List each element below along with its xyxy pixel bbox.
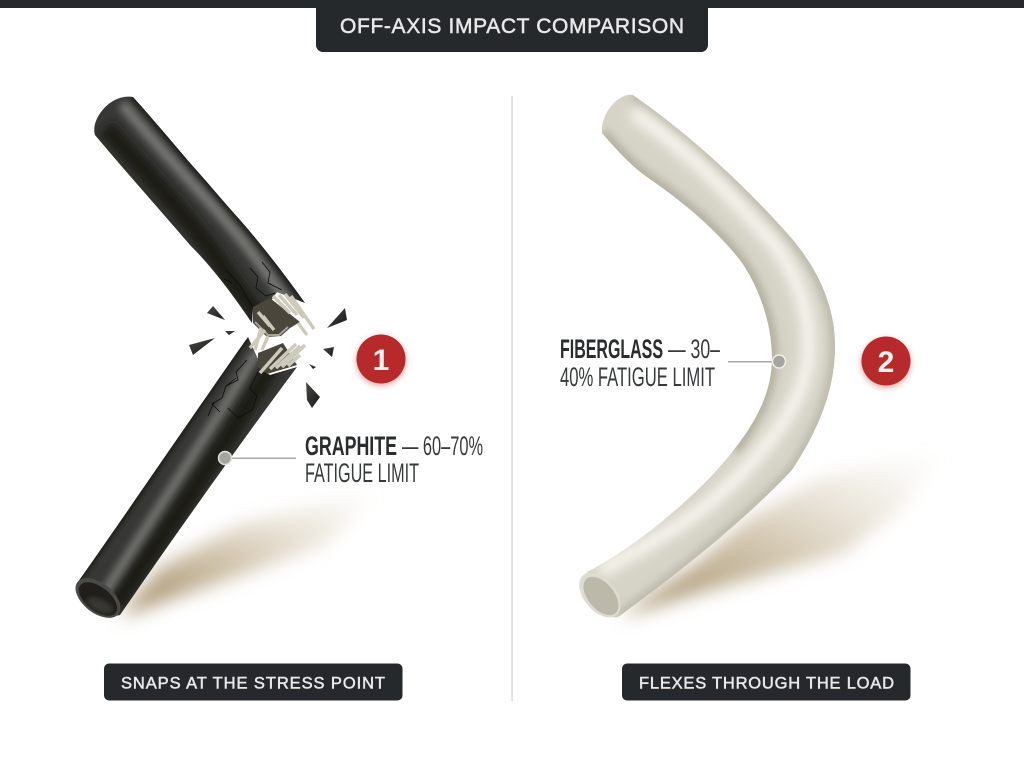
callout: graphite label: [218, 431, 483, 488]
caption: graphite: [104, 664, 402, 700]
label text: [560, 334, 720, 392]
callout: fiberglass label: [560, 334, 786, 392]
label text: GRAPHITE: [305, 431, 397, 461]
label text: [305, 431, 483, 488]
shadow: graphite tube: [120, 488, 385, 617]
anchor dot: [218, 452, 232, 464]
caption: fiberglass: [622, 664, 910, 700]
leader line: [728, 361, 774, 362]
label text: FATIGUE LIMIT: [305, 458, 419, 488]
panel: graphite tube: [68, 85, 320, 626]
upper graphite tube segment: [94, 96, 305, 323]
top bar: [0, 0, 1024, 8]
lower graphite tube segment: [78, 337, 297, 616]
cracks on upper segment: [224, 262, 282, 307]
panel: fiberglass tube: [571, 85, 845, 625]
cracks on lower segment: [208, 360, 258, 418]
exposed interior and fibers, lower break: [250, 328, 305, 374]
badge 2: 2: [878, 346, 894, 379]
badge 1: [356, 334, 406, 386]
center divider: [512, 96, 513, 701]
shadow: fiberglass tube: [620, 450, 945, 617]
open tube end: [68, 570, 128, 626]
open tube end: [571, 565, 629, 625]
label text: — 30–: [668, 334, 720, 364]
label text: — 60–70%: [402, 431, 483, 461]
caption: graphite: SNAPS AT THE STRESS POINT: [121, 674, 385, 692]
label text: 40% FATIGUE LIMIT: [560, 362, 715, 392]
title banner: [316, 0, 708, 52]
leader line: [226, 458, 296, 459]
title banner: OFF-AXIS IMPACT COMPARISON: [340, 15, 684, 38]
badge 1: 1: [373, 344, 389, 377]
badge 2: [861, 336, 911, 388]
anchor dot: [772, 355, 786, 368]
label text: FIBERGLASS: [560, 334, 663, 364]
fragments: shattered shards: [189, 306, 347, 408]
exposed interior and fibers, upper break: [253, 294, 314, 337]
caption: fiberglass: FLEXES THROUGH THE LOAD: [639, 674, 894, 692]
